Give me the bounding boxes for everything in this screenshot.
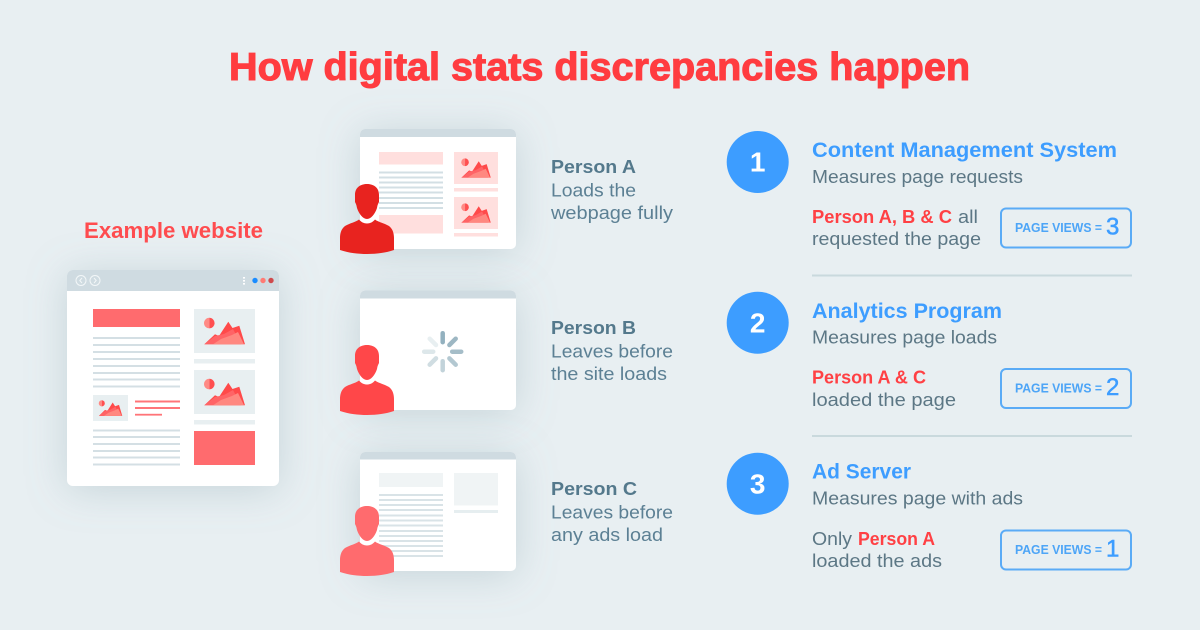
number badge 1: 1 xyxy=(750,146,765,178)
step 1 explanation: all xyxy=(958,207,978,227)
icon: person C xyxy=(340,506,394,576)
browser menu dots xyxy=(243,277,274,285)
panel: example website browser xyxy=(67,270,279,486)
page views box 1 xyxy=(1001,208,1131,248)
step 2 explanation: Person A & C xyxy=(812,366,926,388)
article text lines xyxy=(93,337,180,466)
number badge 3 xyxy=(727,453,789,515)
panel: person A browser xyxy=(360,129,516,249)
page views box 3: 1 xyxy=(1106,536,1119,562)
step 2 explanation: loaded the page xyxy=(812,390,956,410)
grey header block xyxy=(379,473,443,487)
text lines xyxy=(379,494,443,557)
panel: person C browser xyxy=(360,452,516,571)
divider xyxy=(812,435,1132,437)
step 2 heading: Analytics Program xyxy=(812,300,1002,323)
number badge 2 xyxy=(727,292,789,354)
bar 1 xyxy=(454,188,498,192)
panel: step 2 analytics program xyxy=(727,292,1131,410)
step 3 explanation: loaded the ads xyxy=(812,551,942,571)
step 1 explanation xyxy=(812,206,981,249)
text: person C xyxy=(551,478,673,545)
caption bar 1 xyxy=(194,359,255,364)
text: person A xyxy=(550,156,673,223)
text lines xyxy=(379,172,443,209)
step 2 description: Measures page loads xyxy=(812,328,997,348)
panel: person B browser xyxy=(360,290,516,410)
page views box 1: 3 xyxy=(1106,214,1119,240)
text: person B: Person B xyxy=(551,317,636,338)
browser bar xyxy=(360,290,516,298)
step 3 explanation: Person A xyxy=(858,528,935,549)
text: person B: the site loads xyxy=(551,364,667,384)
page views box 3: PAGE VIEWS = xyxy=(1015,543,1102,557)
step 3 explanation: Only xyxy=(812,529,852,549)
step 3 description: Measures page with ads xyxy=(812,488,1023,508)
divider xyxy=(812,274,1132,276)
number badge 1 xyxy=(727,131,789,193)
text: person A: Loads the xyxy=(551,180,636,200)
page views box 2 xyxy=(1001,369,1131,408)
pink lower block xyxy=(379,215,443,234)
step 2 explanation xyxy=(812,366,956,410)
page views box 1: PAGE VIEWS = xyxy=(1015,221,1102,235)
title: How digital stats discrepancies happen xyxy=(229,46,970,89)
loading spinner xyxy=(424,333,461,370)
pink header block xyxy=(379,152,443,164)
icon: person A xyxy=(340,184,394,254)
image 1 xyxy=(454,152,498,184)
caption bar xyxy=(454,510,498,513)
panel: step 1 content management system xyxy=(727,131,1131,249)
text: person C: Leaves before xyxy=(551,502,673,522)
step 1 explanation: requested the page xyxy=(812,229,981,249)
text: person C: any ads load xyxy=(551,525,663,545)
step 1 description: Measures page requests xyxy=(812,167,1023,187)
text: person A: Person A xyxy=(551,156,636,177)
page views box 2: 2 xyxy=(1106,374,1119,401)
browser title bar xyxy=(67,270,279,291)
number badge 2: 2 xyxy=(750,308,765,338)
browser bar xyxy=(360,452,516,460)
headline block xyxy=(93,309,180,327)
image 1 xyxy=(194,309,255,353)
image 2 xyxy=(454,197,498,229)
step 1 heading: Content Management System xyxy=(812,139,1117,162)
bar 2 xyxy=(454,233,498,236)
image 2 xyxy=(194,370,255,414)
panel: step 3 ad server xyxy=(727,453,1131,571)
page views box 3 xyxy=(1001,530,1131,570)
step 1 explanation: Person A, B & C xyxy=(812,206,952,227)
step 3 heading: Ad Server xyxy=(812,460,911,484)
empty image placeholder xyxy=(454,473,498,506)
red caption lines xyxy=(135,400,180,416)
caption bar 2 xyxy=(194,420,255,424)
text: person B: Leaves before xyxy=(551,342,673,362)
number badge 3: 3 xyxy=(750,468,765,500)
browser nav buttons xyxy=(76,276,100,286)
browser bar xyxy=(360,129,516,137)
text: person A: webpage fully xyxy=(550,203,673,223)
icon: person B xyxy=(340,345,394,415)
ad block xyxy=(194,431,255,465)
heading: example website: Example website xyxy=(84,218,263,243)
inline image xyxy=(93,395,128,421)
text: person C: Person C xyxy=(551,478,637,499)
page views box 2: PAGE VIEWS = xyxy=(1015,382,1102,396)
step 3 explanation xyxy=(812,528,942,571)
text: person B xyxy=(551,317,673,384)
